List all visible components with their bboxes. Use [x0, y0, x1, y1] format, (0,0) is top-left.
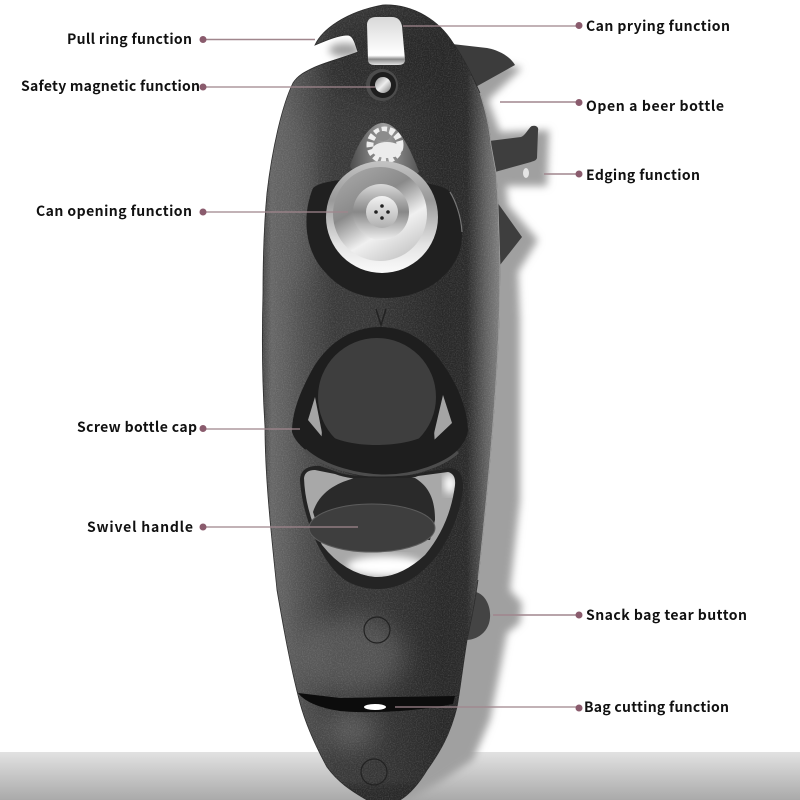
label: snack bag tear button: Snack bag tear button [586, 605, 747, 625]
label: can opening function [36, 201, 348, 221]
label: bag cutting function [395, 697, 729, 717]
drop shadow of the opener [329, 43, 549, 800]
label: swivel handle [87, 517, 358, 537]
white chip under tab [523, 168, 529, 178]
dark recess round disc [306, 178, 462, 298]
label: open a beer bottle [500, 96, 724, 116]
steel disc [326, 161, 438, 273]
lower window: swivel handle [300, 465, 465, 589]
knob face [309, 504, 435, 552]
label: snack bag tear button [493, 605, 747, 625]
label: edging function: Edging function [586, 165, 700, 185]
label: pull ring function [67, 29, 315, 49]
label: open a beer bottle: Open a beer bottle [586, 96, 724, 116]
label: screw bottle cap: Screw bottle cap [77, 417, 197, 437]
light right edge line [478, 93, 500, 580]
label: bag cutting function: Bag cutting function [584, 697, 729, 717]
upper ring: screw bottle cap [292, 327, 468, 478]
top right prying fin [452, 44, 515, 89]
snack bag tear button [467, 592, 490, 640]
label: can prying function: Can prying function [586, 16, 730, 36]
label: pull ring function: Pull ring function [67, 29, 192, 49]
bag cutting slit [298, 693, 455, 712]
main body [262, 5, 500, 800]
label: swivel handle: Swivel handle [87, 517, 193, 537]
opener tool [260, 0, 538, 800]
arrow mark [376, 309, 386, 325]
cutter plate and gear [350, 123, 419, 185]
knob back [313, 478, 435, 540]
floor band [0, 752, 800, 800]
metal pull clip [367, 17, 405, 65]
label: can prying function [403, 16, 730, 36]
slot right of disc [450, 192, 462, 232]
label: screw bottle cap [77, 417, 300, 437]
label: safety magnetic function [21, 76, 375, 96]
round mark lower [361, 759, 387, 785]
edging tab [489, 126, 538, 172]
magnet rivet [366, 69, 398, 101]
round mark upper [364, 617, 390, 643]
lower side fin [497, 202, 522, 265]
label: can opening function: Can opening function [36, 201, 192, 221]
label: safety magnetic function: Safety magnetic function [21, 76, 200, 96]
